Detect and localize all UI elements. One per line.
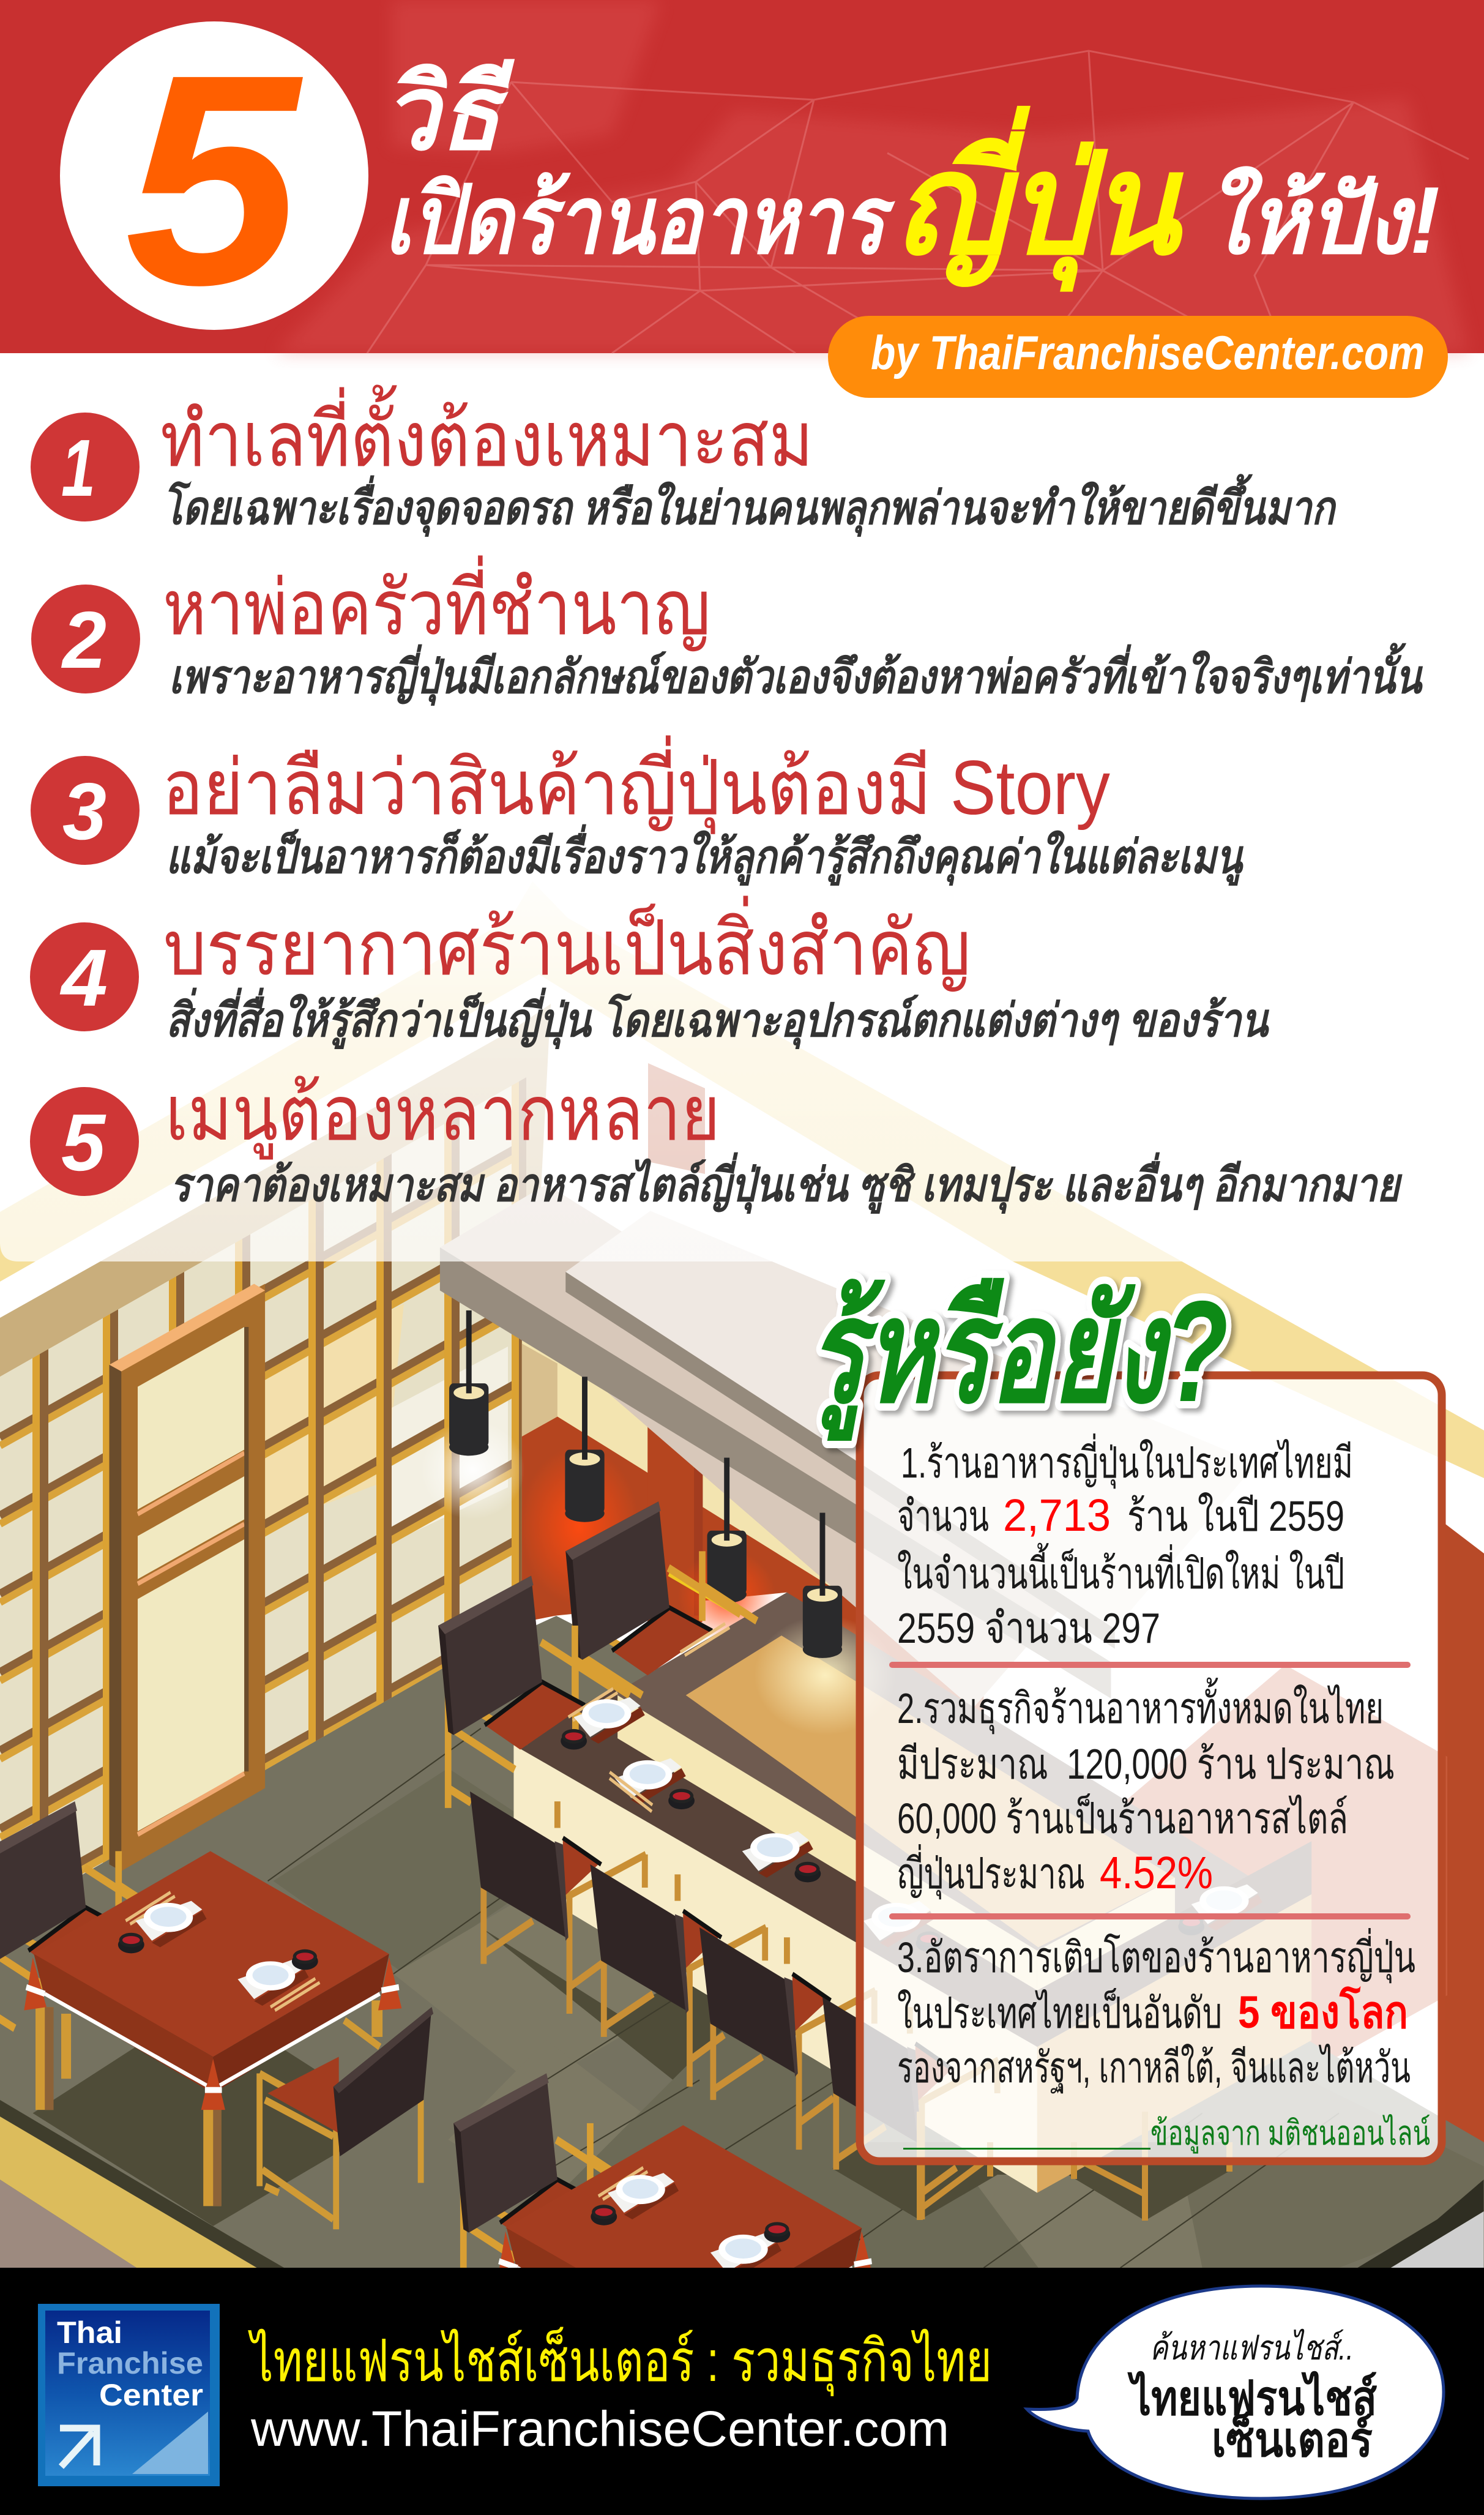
tip 4 — [30, 895, 1270, 1049]
logo: Center — [99, 2378, 203, 2412]
tip 3: แม้จะเป็นอาหารก็ต้องมีเรื่องราวให้ลูกค้ารู้สึกถึงคุณค่าในแต่ละเมนู — [166, 824, 1244, 886]
tip 2: 2 — [61, 595, 106, 685]
world map network — [275, 0, 1469, 353]
chair legs below panel — [920, 2112, 1229, 2221]
speech bubble: ไทยแฟรนไชส์ — [1127, 2371, 1377, 2425]
title highlight: ญี่ปุ่น — [895, 105, 1184, 292]
tip 2: หาพ่อครัวที่ชำนาญ — [163, 555, 710, 652]
fact 1: 2,713 — [1003, 1490, 1111, 1541]
door — [110, 1284, 265, 1871]
fact 1 — [897, 1433, 1353, 1652]
tip 5 — [30, 1071, 1403, 1214]
logo: Franchise — [57, 2346, 203, 2380]
tip 4: 4 — [59, 933, 108, 1023]
site name: ไทยแฟรนไชส์เซ็นเตอร์ : รวมธุรกิจไทย — [248, 2326, 992, 2396]
speech bubble — [1027, 2286, 1444, 2498]
pendant lamps — [449, 1310, 842, 1658]
tip 1: ทำเลที่ตั้งต้องเหมาะสม — [160, 384, 813, 482]
footer band — [0, 2268, 1484, 2515]
back wall — [421, 1324, 983, 1728]
icon: arrow — [60, 2428, 97, 2467]
tip 3 — [31, 735, 1244, 886]
header band — [0, 0, 1484, 353]
tip 1 — [31, 384, 1337, 537]
speech bubble: เซ็นเตอร์ — [1212, 2412, 1373, 2467]
title end: ให้ปัง! — [1204, 166, 1440, 273]
heading: did you know: รู้หรือยัง? — [809, 1271, 1228, 1441]
fact 2 — [897, 1677, 1395, 1900]
fact 3 — [897, 1928, 1415, 2093]
fact 3: 5 ของโลก — [1238, 1986, 1408, 2038]
tip 3: 3 — [62, 766, 106, 856]
byline pill — [828, 316, 1448, 398]
speech bubble: ค้นหาแฟรนไชส์.. — [1150, 2328, 1354, 2367]
fact 3: ในประเทศไทยเป็นอันดับ — [897, 1988, 1222, 2037]
tip 4: สิ่งที่สื่อให้รู้สึกว่าเป็นญี่ปุ่น โดยเฉพาะอุปกรณ์ตกแต่งต่างๆ ของร้าน — [166, 987, 1270, 1049]
big circle with 5: 5 — [125, 12, 306, 347]
tip 5: 5 — [61, 1097, 106, 1187]
logo — [38, 2304, 220, 2486]
big circle with 5 — [60, 12, 368, 347]
tip 5: เมนูต้องหลากหลาย — [165, 1071, 720, 1160]
fact 2: 60,000 ร้านเป็นร้านอาหารสไตล์ — [897, 1793, 1348, 1842]
tip 1: 1 — [61, 423, 95, 513]
fact 2: ญี่ปุ่นประมาณ — [897, 1844, 1085, 1900]
title — [60, 12, 1440, 347]
fact 1: 2559 จำนวน 297 — [897, 1604, 1160, 1652]
roof stripes — [0, 881, 1484, 2161]
logo: Thai — [57, 2315, 122, 2350]
ceiling beam — [439, 1185, 1115, 1706]
fact 1: จำนวน — [897, 1492, 989, 1540]
furniture — [0, 1501, 1262, 2480]
source — [903, 2113, 1430, 2154]
tip 3: อย่าลืมว่าสินค้าญี่ปุ่นต้องมี Story — [162, 735, 1110, 834]
title line 2: เปิดร้านอาหาร — [384, 167, 895, 273]
white veil over upper scene — [0, 353, 1484, 1261]
tip 4: บรรยากาศร้านเป็นสิ่งสำคัญ — [163, 895, 971, 992]
restaurant scene illustration — [0, 914, 1484, 2268]
site url: www.ThaiFranchiseCenter.com — [250, 2401, 949, 2457]
fact 1: ร้าน ในปี 2559 — [1127, 1492, 1344, 1540]
fact 2: 4.52% — [1100, 1847, 1213, 1898]
floor — [0, 1616, 1484, 2268]
counter — [513, 1593, 1311, 2193]
tip 2 — [31, 555, 1423, 706]
title line 1: วิธี — [382, 55, 515, 171]
shoji wall — [0, 1077, 526, 1875]
panel: did you know — [860, 1375, 1442, 2161]
upper tan band on wall — [0, 1261, 202, 1377]
